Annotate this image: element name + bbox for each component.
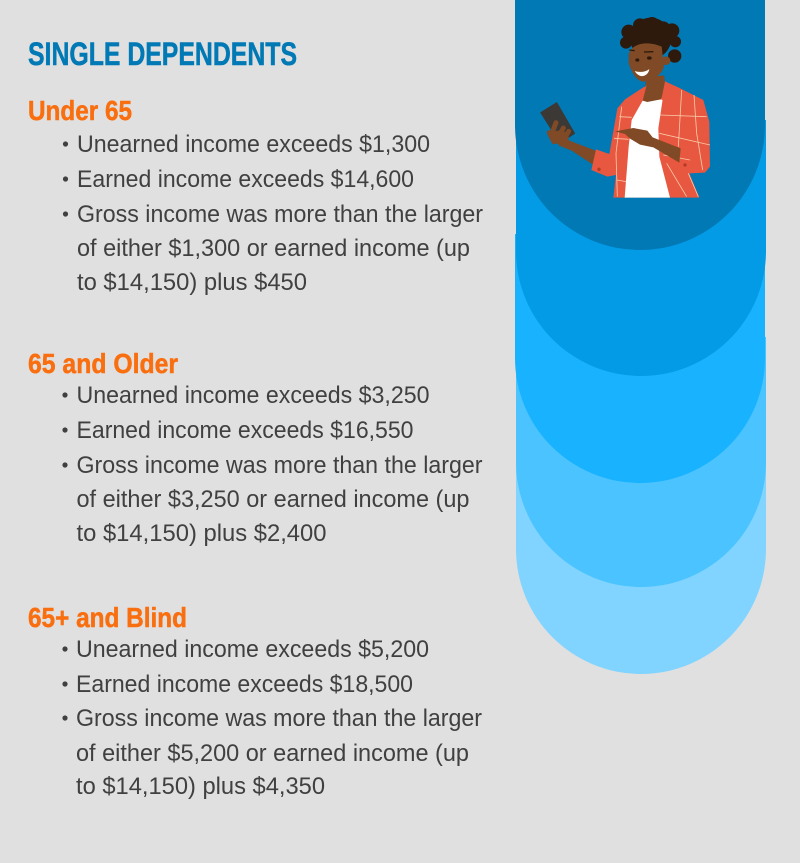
bullet list: 65 and older: to $14,150) plus $2,400	[76, 520, 326, 547]
phone	[541, 103, 574, 143]
bullet list: under 65	[63, 131, 483, 296]
stacked blue arches	[515, 0, 766, 674]
neck	[643, 75, 666, 102]
title: SINGLE DEPENDENTS	[28, 36, 297, 72]
bullet list: 65 and older: Unearned income exceeds $3,250	[76, 382, 430, 409]
hand	[549, 123, 569, 144]
bullet list: 65+ and blind: to $14,150) plus $4,350	[76, 773, 325, 800]
left arm	[558, 135, 598, 166]
bullet list: 65+ and blind: Unearned income exceeds $5,200	[76, 636, 429, 663]
bullet list: 65+ and blind: Gross income was more than the larger	[76, 705, 482, 732]
bullet list: 65 and older: Gross income was more than the larger	[76, 452, 482, 479]
ear	[662, 56, 670, 65]
white t-shirt	[625, 99, 670, 198]
bullet list: under 65: Gross income was more than the larger	[77, 201, 483, 228]
bullet list: under 65: to $14,150) plus $450	[77, 269, 307, 296]
bullet list: under 65: Earned income exceeds $14,600	[77, 166, 414, 193]
icon: person holding a phone	[541, 17, 710, 198]
hair	[620, 17, 681, 63]
pointing arm	[615, 128, 681, 163]
eyes and brows	[629, 50, 653, 52]
bullet list: 65+ and blind: Earned income exceeds $18,500	[76, 671, 413, 698]
heading: 65 and older: 65 and Older	[28, 348, 178, 379]
bullet list: 65+ and blind	[62, 636, 482, 800]
bullet list: under 65: Unearned income exceeds $1,300	[77, 131, 430, 158]
bullet list: 65 and older: Earned income exceeds $16,550	[76, 417, 414, 444]
section: 65 and older	[28, 348, 482, 547]
bullet list: 65 and older	[62, 382, 483, 547]
head	[629, 43, 664, 82]
shirt	[591, 81, 710, 198]
section: under 65	[28, 95, 483, 296]
section: 65+ and blind	[28, 602, 482, 800]
heading: 65+ and blind: 65+ and Blind	[28, 602, 187, 633]
bullet list: 65+ and blind: of either $5,200 or earned income (up	[76, 740, 469, 767]
heading: under 65: Under 65	[28, 95, 132, 126]
cuff buttons	[597, 168, 601, 171]
smile	[635, 69, 649, 76]
bullet list: 65 and older: of either $3,250 or earned income (up	[76, 486, 470, 513]
collar	[632, 81, 678, 113]
shirt plaid lines	[614, 90, 710, 197]
bullet list: under 65: of either $1,300 or earned income (up	[77, 235, 470, 262]
